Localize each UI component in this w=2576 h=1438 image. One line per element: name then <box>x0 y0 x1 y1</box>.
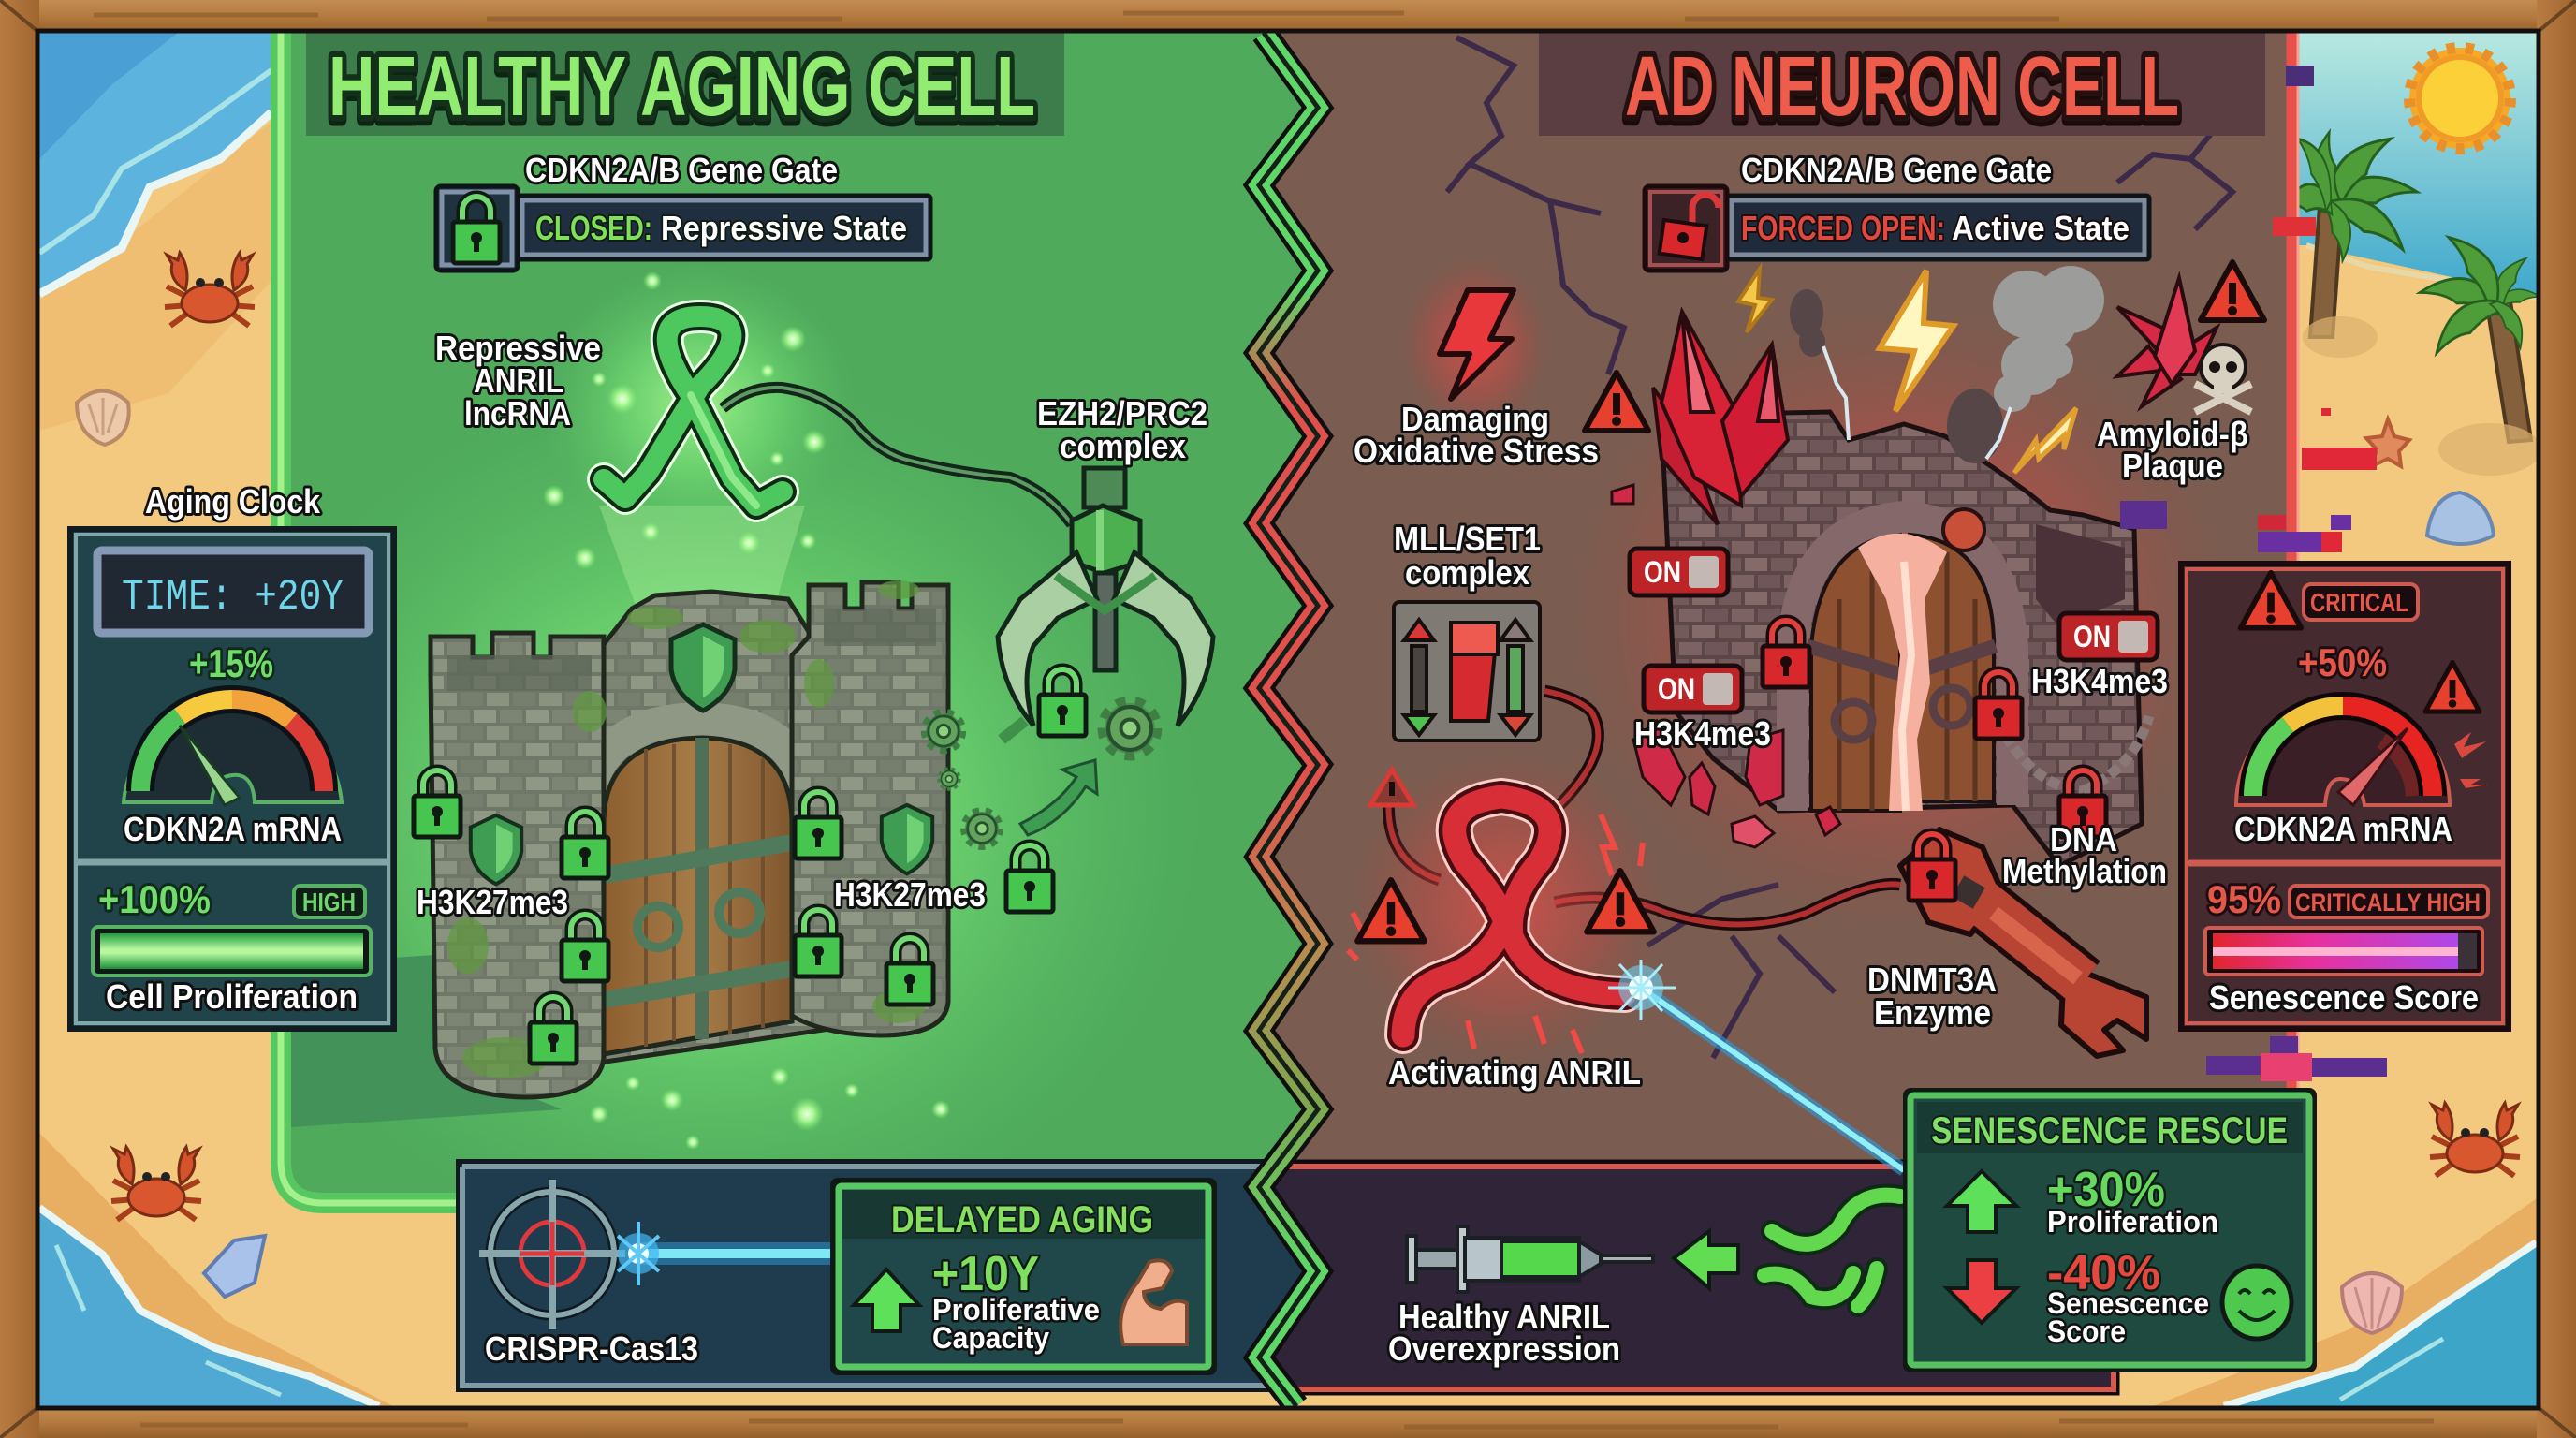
panel: aging clock dashboard <box>70 529 394 1029</box>
value -40% senescence score: Score <box>2047 1314 2126 1348</box>
icon: lightning small left <box>1738 269 1772 332</box>
sky and sea: top right <box>2298 33 2537 298</box>
icon: warning gauge <box>2425 662 2480 712</box>
icon: MLL/SET1 switch <box>1394 602 1540 741</box>
icon: blue shell right <box>2427 492 2494 544</box>
badge: critical <box>2304 584 2418 620</box>
panel title: healthy banner <box>306 33 1064 136</box>
value +100%: +100% <box>98 877 211 921</box>
chains <box>1998 716 2149 791</box>
heading: healthy aging cell: HEALTHY AGING CELL <box>329 40 1035 134</box>
toggle: ON right <box>2059 613 2158 660</box>
toggle: ON top left <box>1630 549 1728 595</box>
label: cell proliferation: Cell Proliferation <box>106 977 358 1016</box>
panel title: AD banner <box>1539 33 2265 136</box>
castle left tower <box>431 633 604 1097</box>
icon: activating ANRIL strand <box>1348 749 1666 1067</box>
panel: healthy aging cell background <box>215 33 1318 1311</box>
shield left <box>471 815 521 884</box>
broken door <box>1807 535 1996 811</box>
icon: repressive ANRIL ribbon <box>538 262 856 543</box>
ocean: bottom right <box>2224 1242 2537 1406</box>
zigzag divider <box>1259 33 1318 1406</box>
gene gate: closed: CDKN2A/B Gene Gate <box>525 151 838 189</box>
beam from ribbon to castle <box>599 506 805 646</box>
icon: CRISPR target <box>479 1180 625 1329</box>
icon: crab bottom left <box>111 1147 201 1220</box>
value -40% senescence score: -40% <box>2047 1246 2160 1300</box>
arrow up <box>854 1269 919 1331</box>
label: MLL/SET1 complex <box>1394 520 1541 592</box>
value +30% proliferation <box>2047 1163 2218 1239</box>
toggle: ON right: ON <box>2073 620 2111 653</box>
cracks in AD panel <box>1447 37 2251 1058</box>
panel: delayed aging box: Capacity <box>932 1321 1049 1355</box>
icon: palm tree left <box>2282 127 2417 358</box>
icon: warning near plaque <box>2201 262 2264 320</box>
castle gate doors <box>604 738 792 1054</box>
label: amyloid plaque: Amyloid-β <box>2097 415 2248 453</box>
label: healthy ANRIL overexpression <box>1388 1298 1620 1368</box>
label: DNA methylation <box>2002 820 2167 890</box>
icon: sun <box>2409 48 2510 149</box>
gene gate: closed: Repressive State <box>661 209 907 247</box>
sparks <box>1823 346 2011 459</box>
icon: DNMT3A wrench <box>1900 829 2146 1056</box>
label: CDKN2A mRNA: CDKN2A mRNA <box>2234 810 2452 848</box>
label: MLL/SET1 complex: complex <box>1405 553 1530 592</box>
laser beam to ANRIL <box>1608 960 1904 1170</box>
icon: amyloid plaque star <box>2117 278 2217 406</box>
gene gate: forced open: Active State <box>1952 209 2130 247</box>
badge: critically high: CRITICALLY HIGH <box>2295 888 2481 917</box>
bar: senescence score <box>2205 928 2482 975</box>
icon: shell top left <box>77 391 129 445</box>
label: activating ANRIL: Activating ANRIL <box>1388 1053 1641 1092</box>
label: EZH2/PRC2 complex: EZH2/PRC2 <box>1037 394 1208 433</box>
wire to EZH2 claw <box>723 388 1072 524</box>
icon: skull and crossbones <box>2195 345 2251 412</box>
value 95%: 95% <box>2207 877 2281 921</box>
gauge: CDKN2A healthy <box>124 699 342 805</box>
castle arch <box>585 719 811 1063</box>
label: CDKN2A mRNA: CDKN2A mRNA <box>124 810 342 848</box>
icon: lock on wrench <box>1909 834 1955 901</box>
heading: AD neuron cell: AD NEURON CELL <box>1625 40 2179 134</box>
icon: warning critical <box>2241 573 2301 628</box>
icon: lightning small right <box>2014 408 2076 473</box>
icon: smiley <box>2222 1266 2291 1339</box>
red locks <box>1763 621 2106 837</box>
sparks by gauge <box>2454 732 2488 788</box>
icon: red lightning oxidative stress <box>1400 256 1550 433</box>
label: EZH2/PRC2 complex: complex <box>1060 427 1186 465</box>
label: damaging oxidative stress: Damaging <box>1401 400 1549 438</box>
icon: palm tree right <box>2420 227 2541 476</box>
panel: AD neuron cell background <box>1259 33 2298 1217</box>
label: H3K27me3 left: H3K27me3 <box>417 883 568 921</box>
icon: base crystals <box>1612 485 1840 847</box>
value +50%: +50% <box>2298 640 2387 684</box>
gene gate: forced open <box>1645 151 2149 271</box>
icon: warning near stress <box>1585 373 1648 431</box>
toggle: ON top left: ON <box>1644 555 1681 589</box>
glowing particles <box>543 271 950 1150</box>
panel: healthy castle gate <box>431 580 948 1097</box>
red sparks around ANRIL <box>1348 814 1643 1053</box>
icon: red crystals on tower <box>1653 312 1788 524</box>
moss patches <box>447 580 925 1078</box>
icon: starfish <box>2366 419 2409 466</box>
gene gate: forced open: CDKN2A/B Gene Gate <box>1741 151 2052 189</box>
gene gate: forced open: FORCED OPEN: <box>1741 209 1945 247</box>
label: EZH2/PRC2 complex <box>1037 394 1208 465</box>
label: damaging oxidative stress <box>1354 400 1599 470</box>
arrow toward syringe <box>1674 1231 1738 1288</box>
glitch pixels <box>2120 66 2387 1168</box>
arrow down <box>1947 1260 2016 1323</box>
label: CRISPR-Cas13: CRISPR-Cas13 <box>485 1329 698 1368</box>
toggle: ON lower left <box>1644 666 1742 712</box>
label: repressive ANRIL lncRNA: Repressive <box>435 329 601 367</box>
time readout <box>97 550 369 633</box>
heading: senescence rescue: SENESCENCE RESCUE <box>1931 1110 2288 1152</box>
ruined right tower interior <box>2036 524 2125 627</box>
panel: delayed aging box: +10Y <box>932 1247 1039 1301</box>
panel: senescence rescue <box>1906 1091 2314 1370</box>
panel: delayed aging box: Proliferative <box>932 1293 1100 1327</box>
label: repressive ANRIL lncRNA: lncRNA <box>464 394 571 433</box>
label: H3K27me3 right: H3K27me3 <box>834 875 986 914</box>
label: healthy ANRIL overexpression: Overexpression <box>1388 1329 1620 1368</box>
icon: crab right <box>2430 1103 2520 1176</box>
arrow up <box>1947 1171 2016 1232</box>
icon: syringe <box>1407 1226 1653 1292</box>
label: MLL/SET1 complex: MLL/SET1 <box>1394 520 1541 558</box>
panel: broken castle gate <box>1662 412 2142 866</box>
label: DNMT3A enzyme <box>1867 961 1997 1032</box>
gene gate: closed <box>436 151 930 271</box>
panel: red stress glow <box>1563 300 2237 936</box>
badge: high: HIGH <box>302 888 356 917</box>
castle right tower <box>792 582 948 1035</box>
value +30% proliferation: Proliferation <box>2047 1205 2218 1239</box>
label: DNMT3A enzyme: Enzyme <box>1874 993 1991 1032</box>
label: repressive ANRIL lncRNA <box>435 329 601 433</box>
icon: crab top left <box>165 253 255 326</box>
shield right <box>882 805 932 873</box>
green locks <box>414 669 1086 1064</box>
panel: delayed aging box <box>834 1181 1213 1372</box>
icon: lightning large <box>1880 271 1954 411</box>
arch <box>1793 517 2012 811</box>
value +15%: +15% <box>189 641 273 685</box>
toggle: ON lower left: ON <box>1658 672 1695 706</box>
icon: flexed arm <box>1120 1260 1187 1344</box>
icon: warning left of ANRIL <box>1357 880 1425 941</box>
ocean: bottom left <box>39 1208 379 1406</box>
icon: healthy ANRIL strands <box>1764 1196 1900 1306</box>
label: repressive ANRIL lncRNA: ANRIL <box>474 361 564 400</box>
value -40% senescence score <box>2047 1246 2209 1348</box>
badge: critical: CRITICAL <box>2310 588 2408 617</box>
label: amyloid plaque: Plaque <box>2122 447 2223 485</box>
CRISPR laser beam <box>618 1222 833 1285</box>
label: amyloid plaque <box>2097 415 2248 485</box>
icon: EZH2/PRC2 claw <box>998 468 1213 726</box>
icon: gray smoke <box>1993 266 2104 412</box>
icon: pink shell right <box>2342 1273 2402 1333</box>
label: H3K4me3 left: H3K4me3 <box>1634 714 1771 753</box>
bar: cell proliferation <box>93 927 371 976</box>
icon: gears and arrow <box>926 703 1155 845</box>
panel: CRISPR delayed aging <box>459 1162 1318 1389</box>
gene gate: closed: CLOSED: <box>535 209 652 247</box>
value +30% proliferation: +30% <box>2047 1163 2165 1217</box>
panel: delayed aging box: DELAYED AGING <box>891 1199 1153 1240</box>
label: healthy ANRIL overexpression: Healthy ANRIL <box>1398 1298 1610 1336</box>
label: senescence score: Senescence Score <box>2209 978 2479 1017</box>
panel: healthy ANRIL overexpression <box>1259 1162 2117 1393</box>
glowing crack <box>1858 534 1947 811</box>
label: DNA methylation: Methylation <box>2002 852 2167 890</box>
label: aging clock: Aging Clock <box>145 482 321 521</box>
label: DNMT3A enzyme: DNMT3A <box>1867 961 1997 999</box>
icon: warning right of ANRIL <box>1587 871 1654 932</box>
label: DNA methylation: DNA <box>2050 820 2117 858</box>
time readout: TIME: +20Y <box>122 573 344 622</box>
icon: dark smoke <box>1790 289 2003 463</box>
shield central <box>671 624 735 711</box>
broken wall <box>1662 412 2142 866</box>
icon: small outlined warning <box>1370 770 1413 805</box>
panel: critical dashboard <box>2181 564 2509 1029</box>
label: H3K4me3 right: H3K4me3 <box>2031 662 2168 700</box>
castle central wall <box>580 592 824 1063</box>
gauge: CDKN2A critical <box>2236 698 2450 805</box>
label: damaging oxidative stress: Oxidative Stress <box>1354 432 1599 470</box>
icon: blue shell left <box>204 1236 265 1297</box>
wires from ANRIL <box>1388 691 1900 925</box>
ocean: top left <box>39 33 271 294</box>
value -40% senescence score: Senescence <box>2047 1286 2209 1320</box>
